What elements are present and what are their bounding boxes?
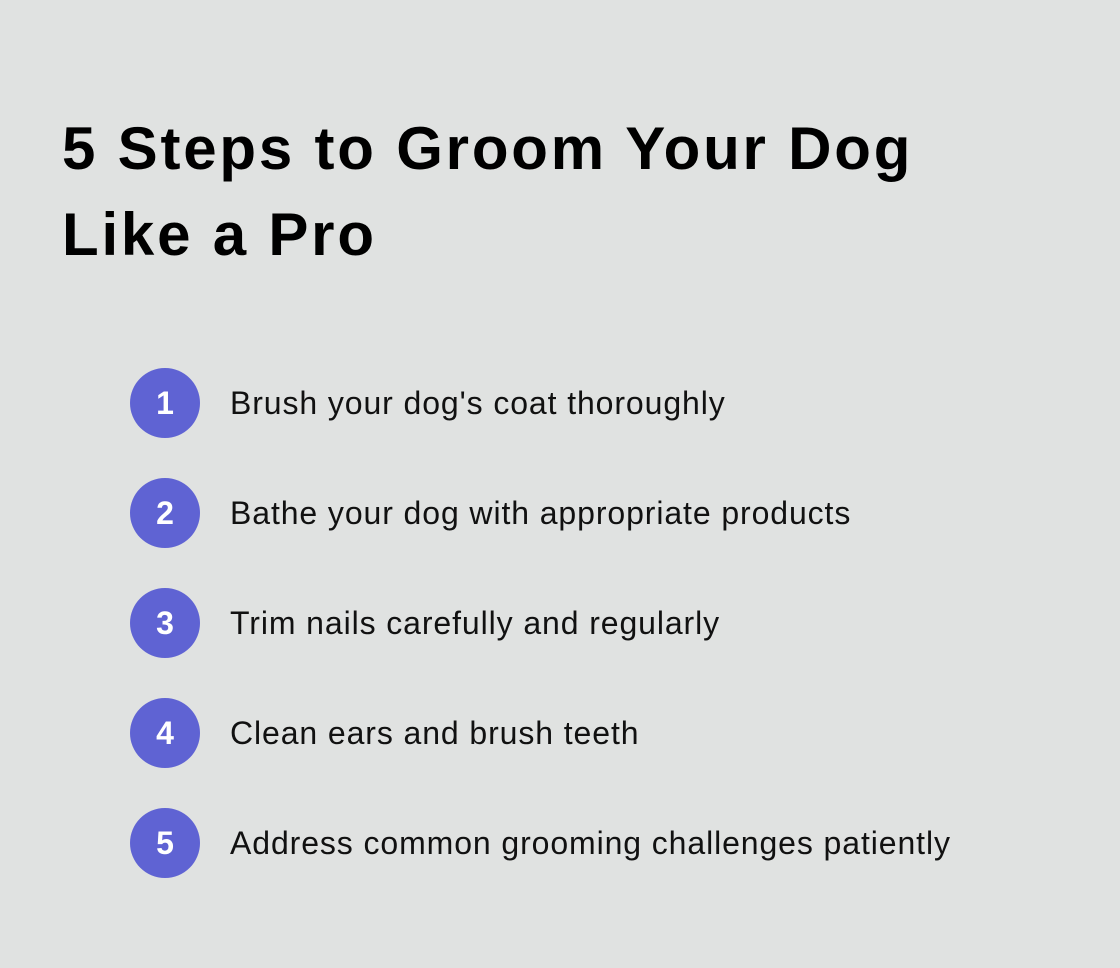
step 2: Bathe your dog with appropriate products xyxy=(230,495,851,531)
step 3 xyxy=(130,588,720,658)
step 1 xyxy=(130,368,726,438)
step 1: Brush your dog's coat thoroughly xyxy=(230,385,726,421)
step 4: 4 xyxy=(156,715,174,751)
title: 5 Steps to Groom Your Dog xyxy=(62,115,913,182)
step 3: Trim nails carefully and regularly xyxy=(230,605,720,641)
step 2: 2 xyxy=(156,495,174,531)
step 2 xyxy=(130,478,851,548)
step 1: 1 xyxy=(156,385,174,421)
title: Like a Pro xyxy=(62,201,377,268)
step 5: 5 xyxy=(156,825,174,861)
step 4 xyxy=(130,698,639,768)
step 5 xyxy=(130,808,951,878)
step 3: 3 xyxy=(156,605,174,641)
step 5: Address common grooming challenges patiently xyxy=(230,825,951,861)
step 4: Clean ears and brush teeth xyxy=(230,715,639,751)
title xyxy=(62,115,913,268)
